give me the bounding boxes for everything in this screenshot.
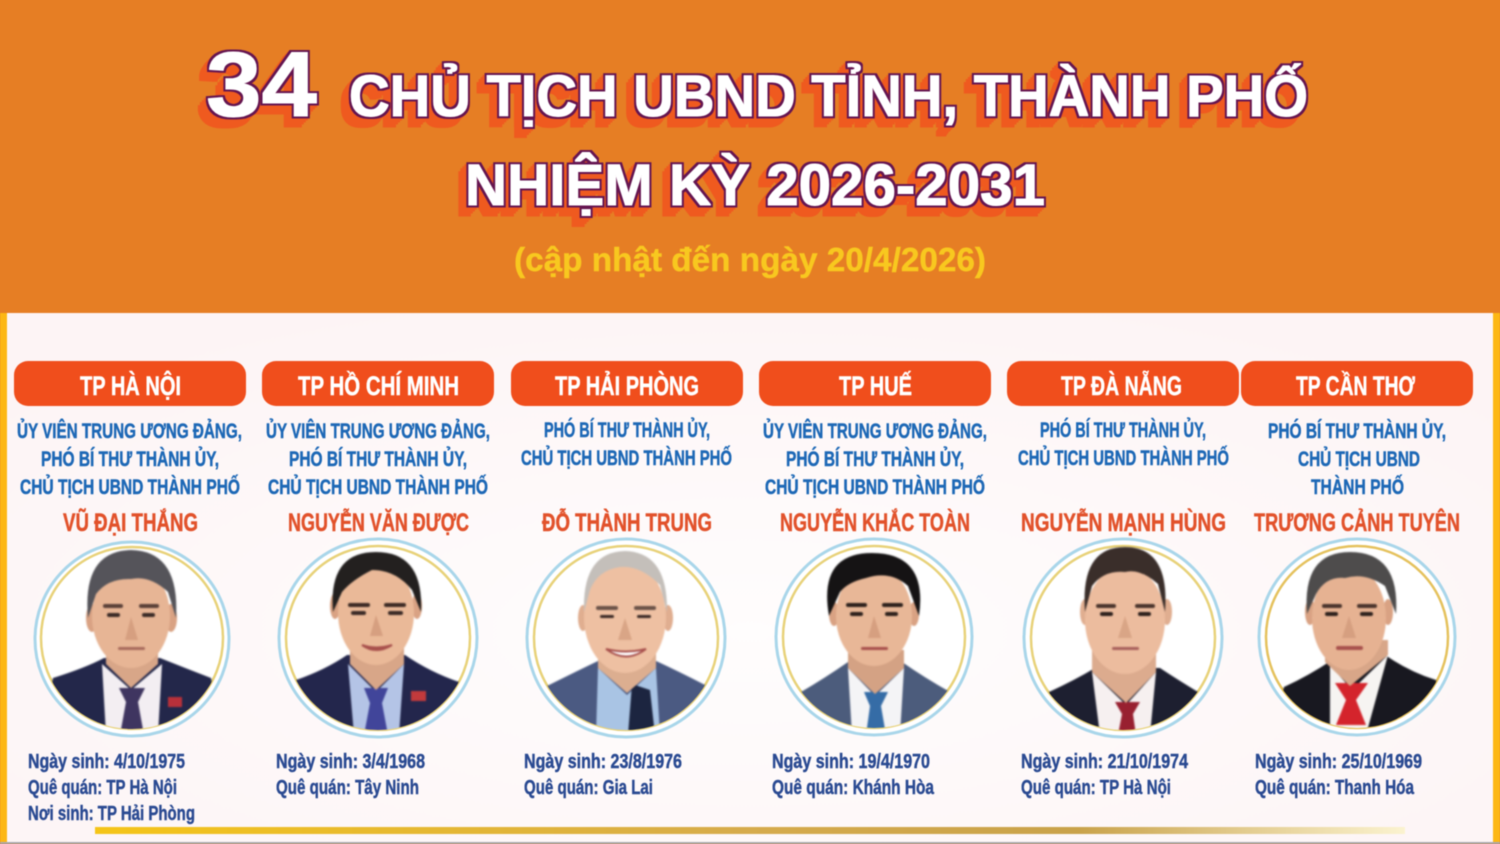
- person name: NGUYỄN KHẮC TOÀN: [780, 507, 970, 537]
- province pill: [759, 361, 991, 406]
- job title: THÀNH PHỐ: [1311, 475, 1404, 499]
- job title: [17, 419, 242, 499]
- person name: VŨ ĐẠI THẮNG: [63, 507, 198, 537]
- card: TP Hồ Chí Minh: [262, 361, 494, 799]
- job title: [1018, 418, 1229, 470]
- person name: NGUYỄN VĂN ĐƯỢC: [288, 507, 469, 537]
- card: TP Hải Phòng: [511, 361, 743, 799]
- card: TP Đà Nẵng: [1007, 361, 1239, 799]
- job title: CHỦ TỊCH UBND THÀNH PHỐ: [268, 475, 488, 499]
- job title: CHỦ TỊCH UBND THÀNH PHỐ: [20, 475, 240, 499]
- card: TP Huế: [759, 361, 991, 799]
- title line two: NHIỆM KỲ 2026-2031: [465, 153, 1045, 218]
- portrait: [279, 539, 477, 737]
- job title: [763, 419, 987, 499]
- province pill: TP HẢI PHÒNG: [555, 369, 699, 401]
- job title: [1268, 419, 1446, 499]
- portrait: [35, 542, 229, 736]
- province pill: [1007, 361, 1239, 406]
- job title: PHÓ BÍ THƯ THÀNH ỦY,: [544, 418, 710, 442]
- portrait: [527, 539, 725, 737]
- job title: [266, 419, 490, 499]
- province pill: TP ĐÀ NẴNG: [1061, 369, 1182, 401]
- job title: ỦY VIÊN TRUNG ƯƠNG ĐẢNG,: [266, 419, 490, 443]
- job title: CHỦ TỊCH UBND THÀNH PHỐ: [1018, 446, 1229, 470]
- job title: PHÓ BÍ THƯ THÀNH ỦY,: [289, 447, 467, 471]
- bio details: [276, 751, 425, 799]
- bio details: Ngày sinh: 4/10/1975: [28, 751, 185, 773]
- bio details: [1021, 751, 1189, 799]
- bio details: Ngày sinh: 25/10/1969: [1255, 751, 1422, 773]
- bio details: Ngày sinh: 21/10/1974: [1021, 751, 1189, 773]
- province pill: [14, 361, 246, 406]
- bio details: [772, 751, 935, 799]
- person name: ĐỖ THÀNH TRUNG: [542, 507, 712, 537]
- bio details: Ngày sinh: 19/4/1970: [772, 751, 930, 773]
- province pill: TP HỒ CHÍ MINH: [298, 370, 459, 401]
- portrait: [1259, 539, 1455, 735]
- job title: CHỦ TỊCH UBND THÀNH PHỐ: [521, 446, 732, 470]
- province pill: [1241, 361, 1473, 406]
- bio details: [28, 751, 195, 825]
- subtitle date: (cập nhật đến ngày 20/4/2026): [514, 241, 986, 278]
- job title: PHÓ BÍ THƯ THÀNH ỦY,: [41, 447, 219, 471]
- province pill: TP CẦN THƠ: [1296, 370, 1415, 401]
- portrait: [1024, 539, 1222, 737]
- job title: ỦY VIÊN TRUNG ƯƠNG ĐẢNG,: [17, 419, 242, 443]
- person name: NGUYỄN MẠNH HÙNG: [1021, 507, 1226, 537]
- bio details: Quê quán: TP Hà Nội: [28, 777, 177, 799]
- job title: ỦY VIÊN TRUNG ƯƠNG ĐẢNG,: [763, 419, 987, 443]
- portrait: [776, 539, 972, 735]
- bio details: Quê quán: TP Hà Nội: [1021, 777, 1171, 799]
- title number: 34: [206, 34, 317, 136]
- bio details: Ngày sinh: 23/8/1976: [524, 751, 682, 773]
- province pill: [262, 361, 494, 406]
- card: TP Hà Nội: [14, 361, 246, 825]
- job title: PHÓ BÍ THƯ THÀNH ỦY,: [786, 447, 964, 471]
- province pill: TP HUẾ: [839, 370, 912, 401]
- job title: PHÓ BÍ THƯ THÀNH ỦY,: [1040, 418, 1206, 442]
- province pill: [511, 361, 743, 406]
- header band: [0, 0, 1500, 314]
- bio details: Ngày sinh: 3/4/1968: [276, 751, 425, 773]
- job title: CHỦ TỊCH UBND THÀNH PHỐ: [765, 475, 985, 499]
- job title: CHỦ TỊCH UBND: [1298, 447, 1420, 471]
- bottom gold line: [95, 827, 1405, 834]
- bio details: Quê quán: Gia Lai: [524, 777, 653, 799]
- bio details: Nơi sinh: TP Hải Phòng: [28, 803, 195, 825]
- bio details: [524, 751, 682, 799]
- bio details: Quê quán: Khánh Hòa: [772, 777, 935, 799]
- job title: [521, 418, 732, 470]
- content panel: [0, 313, 1500, 844]
- title line one: CHỦ TỊCH UBND TỈNH, THÀNH PHỐ: [349, 64, 1308, 129]
- title block: [206, 34, 1308, 218]
- card: TP Cần Thơ: [1241, 361, 1473, 799]
- bio details: Quê quán: Thanh Hóa: [1255, 777, 1415, 799]
- province pill: TP HÀ NỘI: [80, 370, 181, 401]
- bio details: [1255, 751, 1422, 799]
- bio details: Quê quán: Tây Ninh: [276, 777, 419, 799]
